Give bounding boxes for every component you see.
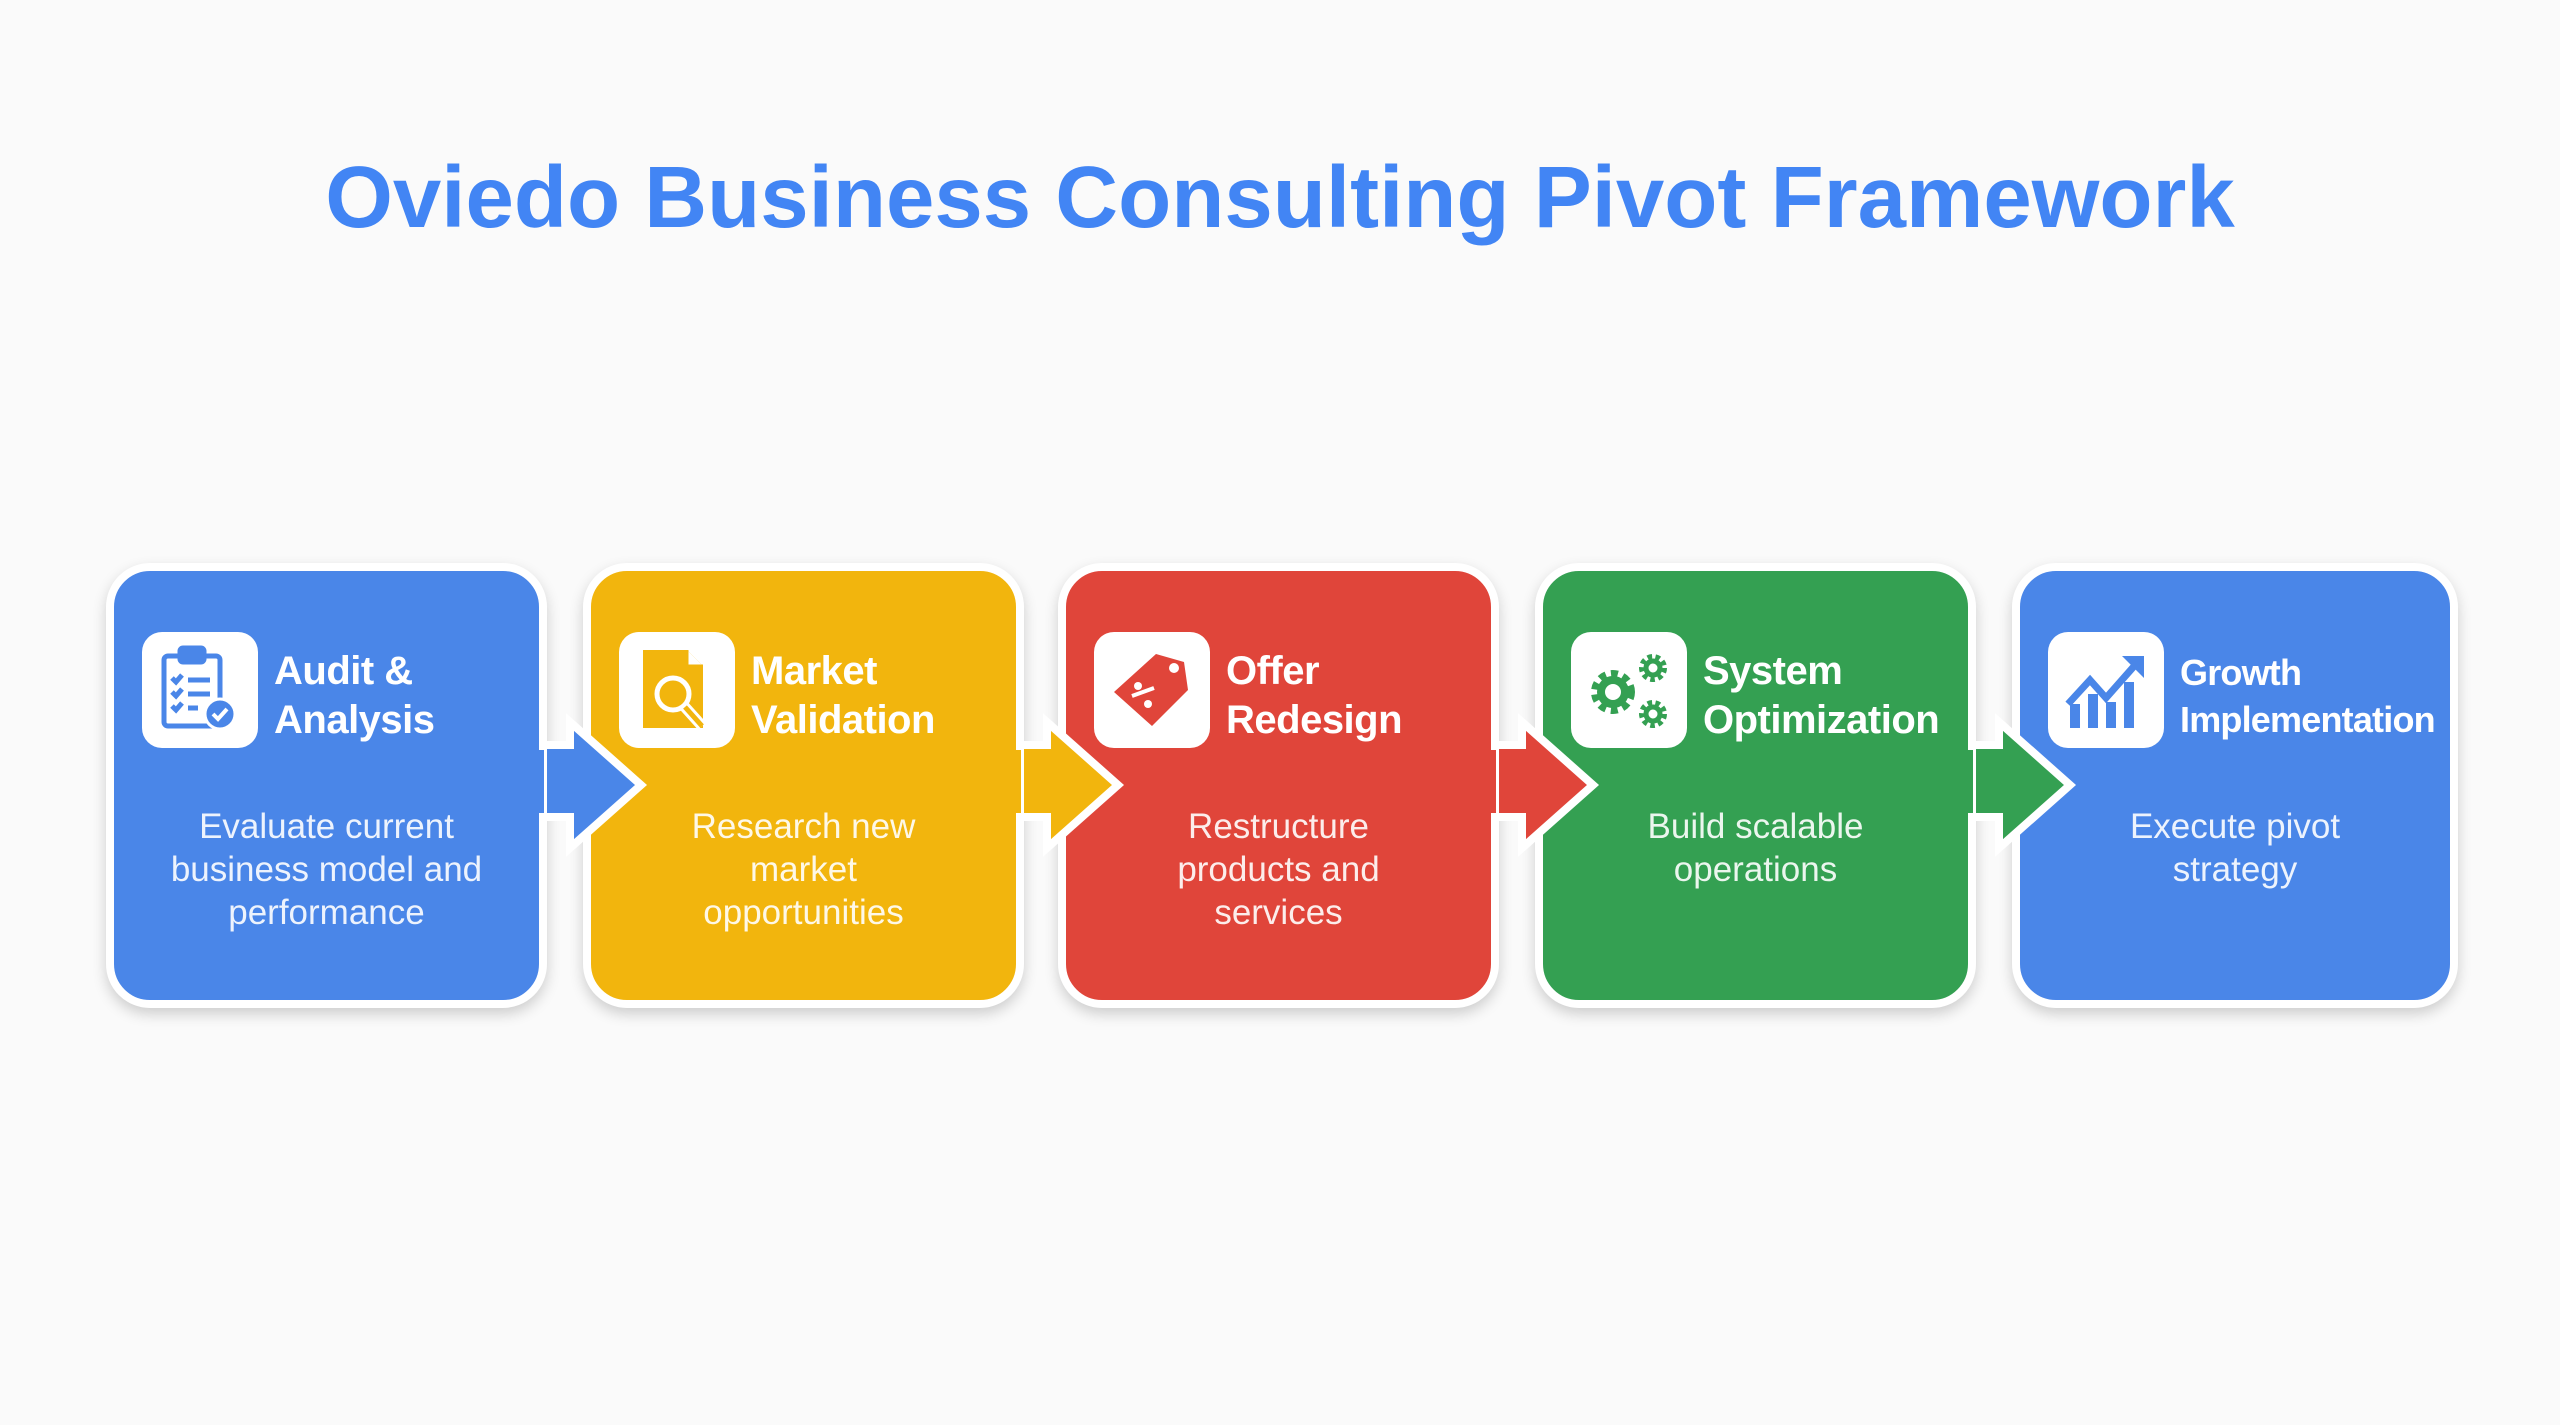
- icon: growth chart: [2048, 632, 2164, 748]
- heading: Optimization: [1703, 698, 1939, 742]
- heading: [1226, 649, 1402, 742]
- description: Execute pivot: [2130, 807, 2340, 846]
- heading: Validation: [751, 698, 935, 742]
- icon: price tag: [1094, 632, 1210, 748]
- panel: offer redesign: [1058, 563, 1499, 1008]
- heading: Offer: [1226, 649, 1319, 693]
- heading: Audit &: [274, 649, 413, 693]
- description: market: [750, 850, 857, 889]
- arrow 3: [1482, 722, 1593, 848]
- heading: [751, 649, 935, 742]
- panel: growth implementation: [2012, 563, 2458, 1008]
- icon: document magnifier: [619, 632, 735, 748]
- title: Oviedo Business Consulting Pivot Framework: [325, 149, 2235, 246]
- heading: [274, 649, 435, 742]
- heading: System: [1703, 649, 1842, 693]
- description: Evaluate current: [199, 807, 454, 846]
- heading: Implementation: [2180, 699, 2435, 740]
- description: opportunities: [703, 893, 904, 932]
- description: [1648, 807, 1863, 889]
- description: [2130, 807, 2340, 889]
- description: business model and: [171, 850, 482, 889]
- arrow 1: [530, 722, 641, 848]
- arrow 2: [1007, 722, 1118, 848]
- description: strategy: [2173, 850, 2297, 889]
- panel: system optimization: [1535, 563, 1976, 1008]
- description: services: [1214, 893, 1343, 932]
- heading: [2180, 652, 2435, 740]
- icon: clipboard: [142, 632, 258, 748]
- heading: Growth: [2180, 652, 2301, 693]
- icon: gears: [1571, 632, 1687, 748]
- heading: Market: [751, 649, 877, 693]
- description: Build scalable: [1648, 807, 1863, 846]
- panel: market validation: [583, 563, 1024, 1008]
- description: Restructure: [1188, 807, 1369, 846]
- description: [692, 807, 916, 932]
- arrow 4: [1959, 722, 2070, 848]
- description: [1177, 807, 1380, 932]
- description: products and: [1177, 850, 1380, 889]
- heading: [1703, 649, 1939, 742]
- heading: Redesign: [1226, 698, 1402, 742]
- description: operations: [1674, 850, 1837, 889]
- description: Research new: [692, 807, 915, 846]
- description: [171, 807, 482, 932]
- description: performance: [228, 893, 425, 932]
- panel: audit & analysis: [106, 563, 547, 1008]
- heading: Analysis: [274, 698, 435, 742]
